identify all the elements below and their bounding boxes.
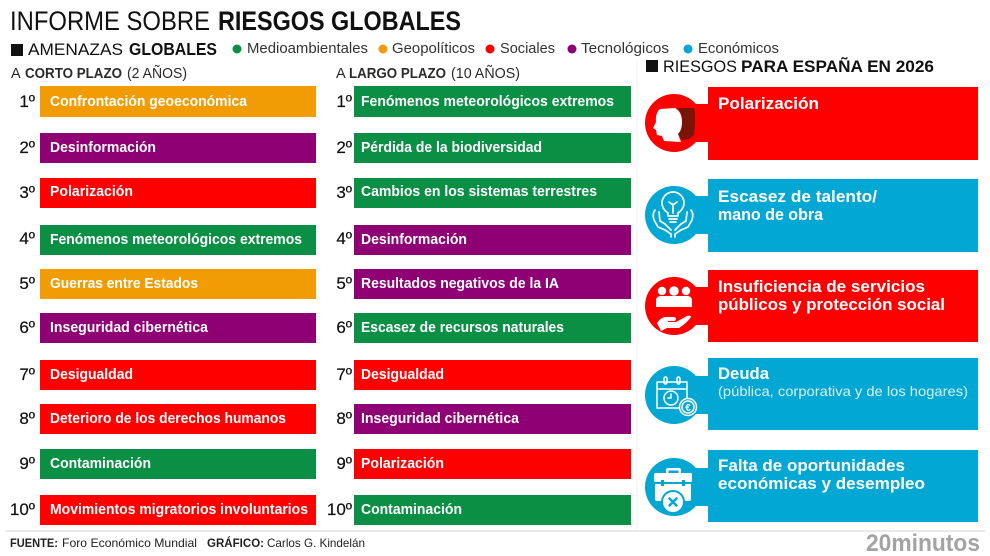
footer credits: Carlos G. Kindelán: [267, 536, 365, 550]
rank 10 short term: Movimientos migratorios involuntarios: [50, 502, 308, 518]
rank 10 short term: 10º: [10, 500, 35, 519]
rank 8 long term: 8º: [336, 409, 352, 428]
heading: a corto plazo: (2 AÑOS): [127, 65, 187, 82]
rank 6 short term: 6º: [19, 318, 35, 337]
rank 4 long term: 4º: [336, 229, 352, 248]
icon: opposed heads: [653, 108, 695, 142]
panel: Polarización: [645, 87, 978, 160]
rank 9 long term: [336, 449, 631, 479]
rank 9 long term: Polarización: [361, 456, 444, 472]
heading: a largo plazo: [336, 65, 520, 82]
heading: a corto plazo: A: [11, 66, 21, 82]
rank 10 short term: [10, 495, 316, 525]
title: INFORME SOBRE: [10, 6, 210, 36]
heading: riesgos para España: PARA ESPAÑA EN 2026: [741, 56, 934, 76]
rank 8 long term: Inseguridad cibernética: [361, 411, 520, 427]
rank 4 long term: [336, 225, 631, 255]
panel: Escasez de talento: Escasez de talento/: [718, 187, 877, 206]
rank 1 long term: Fenómenos meteorológicos extremos: [361, 94, 614, 110]
panel: ranking a largo plazo: [327, 86, 631, 525]
heading: a corto plazo: [11, 65, 187, 82]
panel: Insuficiencia de servicios: [645, 270, 978, 342]
legend: Sociales: [500, 41, 555, 57]
icon: briefcase with cross: [654, 468, 692, 513]
rank 5 long term: [336, 269, 631, 299]
heading: amenazas globales: GLOBALES: [129, 39, 217, 59]
rank 10 long term: [327, 495, 631, 525]
heading: a largo plazo: LARGO PLAZO: [349, 66, 446, 82]
rank 5 long term: Resultados negativos de la IA: [361, 276, 559, 292]
icon: calendar, clock and euro: [657, 377, 696, 416]
rank 7 short term: [19, 360, 316, 390]
rank 7 short term: Desigualdad: [50, 367, 133, 383]
panel: Escasez de talento: [645, 179, 978, 252]
panel: Polarización: Polarización: [718, 94, 819, 113]
legend: Geopolíticos: [392, 41, 475, 57]
heading: riesgos para España: RIESGOS: [663, 58, 737, 76]
rank 8 long term: [336, 404, 631, 434]
rank 1 long term: 1º: [336, 92, 352, 111]
rank 10 long term: Contaminación: [361, 502, 462, 518]
rank 6 short term: Inseguridad cibernética: [50, 320, 209, 336]
title: RIESGOS GLOBALES: [218, 6, 461, 36]
rank 3 long term: 3º: [336, 183, 352, 202]
rank 4 short term: [19, 225, 316, 255]
footer credits: FUENTE:: [10, 536, 58, 550]
rank 5 short term: Guerras entre Estados: [50, 276, 198, 292]
legend: Tecnológicos: [581, 41, 669, 57]
rank 1 short term: 1º: [19, 92, 35, 111]
rank 6 long term: Escasez de recursos naturales: [361, 320, 564, 336]
icon: bulb in hands: [653, 192, 693, 237]
legend: [232, 41, 779, 57]
rank 6 short term: [19, 313, 316, 343]
rank 8 short term: [19, 404, 316, 434]
rank 8 short term: Deterioro de los derechos humanos: [50, 411, 286, 427]
rank 2 long term: [336, 133, 631, 163]
heading: a largo plazo: (10 AÑOS): [451, 65, 520, 82]
rank 5 short term: 5º: [19, 274, 35, 293]
rank 3 long term: Cambios en los sistemas terrestres: [361, 184, 597, 200]
footer credits: [10, 535, 365, 550]
footer credits: Foro Económico Mundial: [62, 536, 197, 550]
panel: ranking a corto plazo: [10, 86, 316, 525]
panel: Deuda: [645, 358, 978, 430]
rank 5 short term: [19, 269, 316, 299]
legend: Económicos: [698, 41, 779, 57]
icon: calendar, clock and euro: €: [685, 403, 691, 414]
heading: a corto plazo: CORTO PLAZO: [25, 66, 122, 82]
rank 3 short term: Polarización: [50, 184, 133, 200]
rank 2 long term: Pérdida de la biodiversidad: [361, 140, 542, 156]
rank 9 long term: 9º: [336, 454, 352, 473]
rank 6 long term: 6º: [336, 318, 352, 337]
footer credits: GRÁFICO:: [207, 535, 264, 550]
rank 10 long term: 10º: [327, 500, 352, 519]
panel: Deuda: (pública, corporativa y de los hogares): [718, 383, 968, 399]
rank 2 short term: [19, 133, 316, 163]
rank 9 short term: 9º: [19, 454, 35, 473]
panel: Insuficiencia de servicios: Insuficiencia de servicios: [718, 277, 925, 296]
rank 9 short term: [19, 449, 316, 479]
rank 3 short term: 3º: [19, 183, 35, 202]
heading: a largo plazo: A: [336, 66, 346, 82]
rank 7 long term: Desigualdad: [361, 367, 444, 383]
rank 8 short term: 8º: [19, 409, 35, 428]
panel: Insuficiencia de servicios: públicos y protección social: [718, 295, 945, 314]
heading: riesgos para España: [646, 56, 934, 76]
legend: Medioambientales: [247, 41, 368, 57]
rank 1 short term: [19, 86, 316, 117]
rank 7 short term: 7º: [19, 365, 35, 384]
rank 2 short term: Desinformación: [50, 140, 156, 156]
rank 4 short term: 4º: [19, 229, 35, 248]
heading: amenazas globales: AMENAZAS: [28, 40, 123, 59]
title: [10, 6, 461, 36]
panel: Deuda: Deuda: [718, 364, 770, 383]
rank 1 long term: [336, 86, 631, 117]
rank 7 long term: 7º: [336, 365, 352, 384]
rank 7 long term: [336, 360, 631, 390]
rank 6 long term: [336, 313, 631, 343]
rank 2 long term: 2º: [336, 138, 352, 157]
rank 1 short term: Confrontación geoeconómica: [50, 94, 248, 110]
rank 4 short term: Fenómenos meteorológicos extremos: [50, 232, 302, 248]
panel: Falta de oportunidades: económicas y desempleo: [718, 474, 925, 493]
rank 3 long term: [336, 178, 631, 208]
rank 9 short term: Contaminación: [50, 456, 151, 472]
panel: Falta de oportunidades: Falta de oportunidades: [718, 456, 905, 475]
panel: Falta de oportunidades: [645, 450, 978, 522]
panel: Escasez de talento: mano de obra: [718, 205, 824, 224]
rank 3 short term: [19, 178, 316, 208]
rank 2 short term: 2º: [19, 138, 35, 157]
heading: amenazas globales: [11, 39, 217, 59]
rank 5 long term: 5º: [336, 274, 352, 293]
rank 4 long term: Desinformación: [361, 232, 467, 248]
icon: people over a hand: [656, 286, 692, 331]
